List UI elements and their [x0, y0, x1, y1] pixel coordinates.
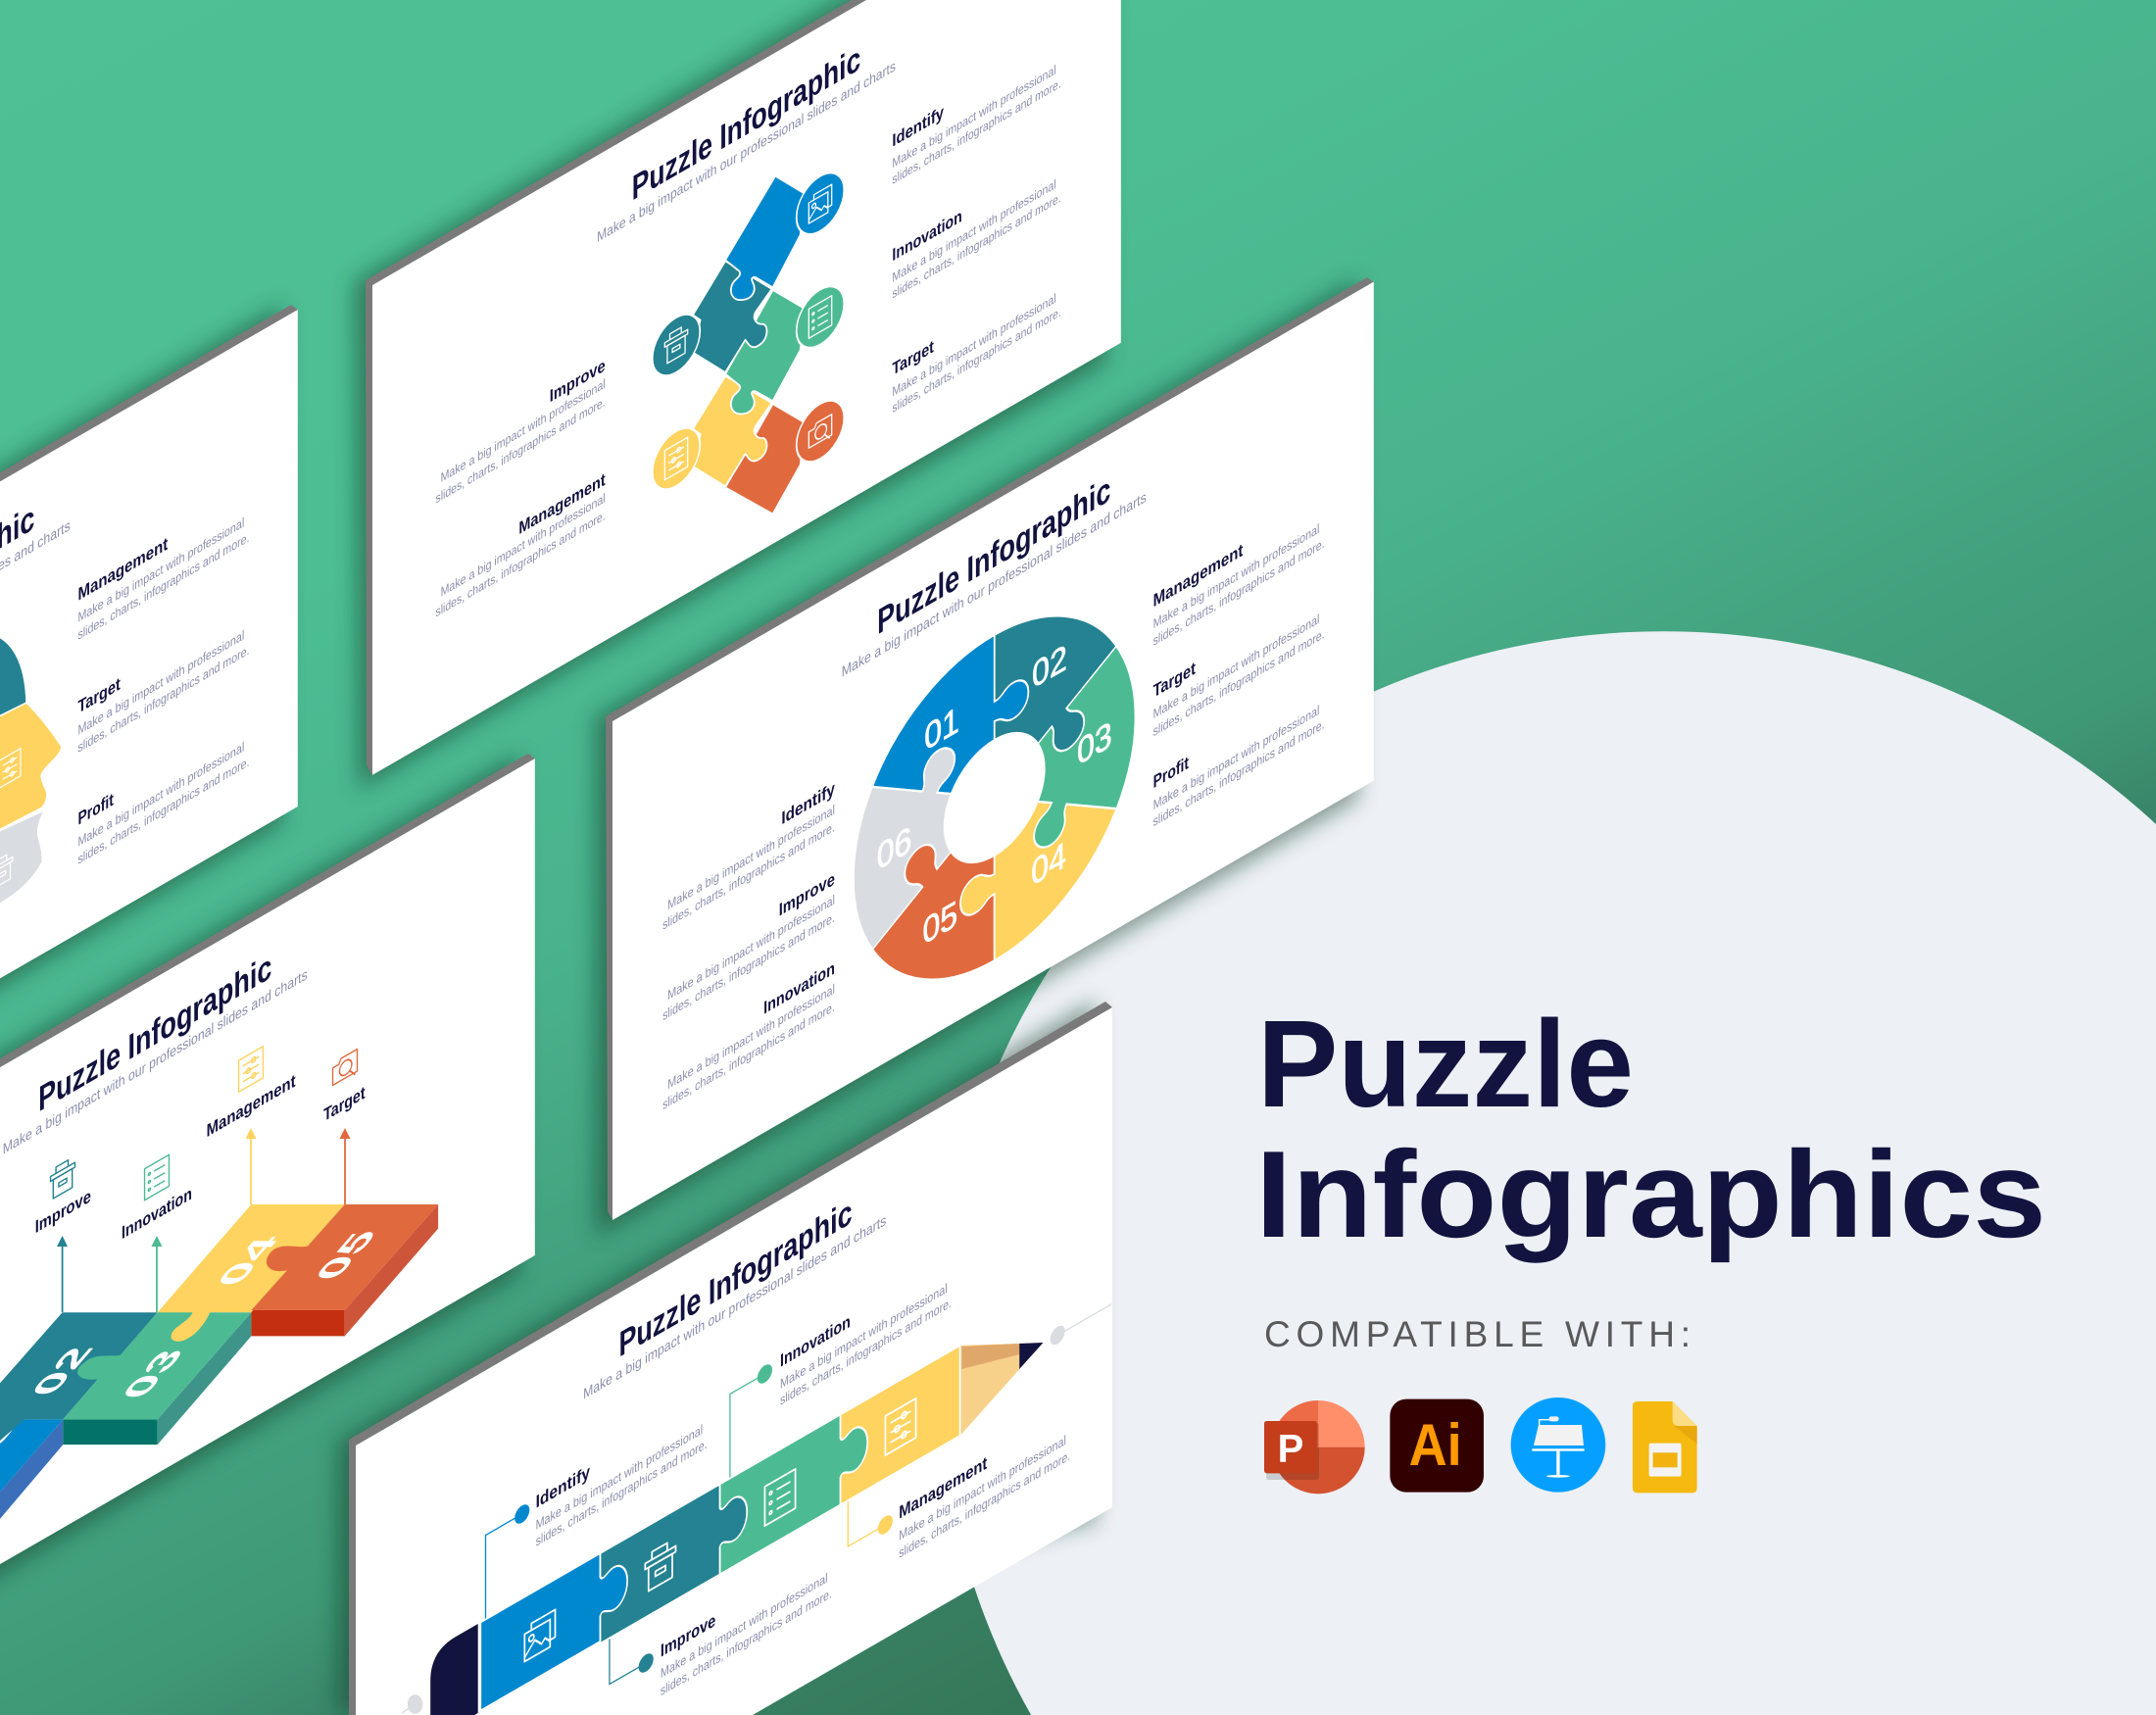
text block: target: slides, charts, infographics and more.	[1153, 625, 1325, 740]
text block: innovation: Make a big impact with professional	[892, 176, 1056, 285]
piece: green	[725, 290, 806, 414]
heading: Puzzle: Puzzle	[1257, 995, 1634, 1133]
pencil	[430, 1298, 1043, 1715]
slide title: Puzzle Infographic	[632, 38, 860, 209]
label: management: Management	[207, 1070, 296, 1142]
text block: management: slides, charts, infographics and more.	[436, 508, 606, 620]
pencil end	[430, 1624, 478, 1715]
icon: sliders	[885, 1398, 916, 1455]
guide line left	[402, 1695, 422, 1713]
green top	[63, 1312, 251, 1419]
icon: Illustrator: Ai	[1409, 1412, 1462, 1478]
segment teal	[600, 1468, 747, 1643]
number 05: 05	[306, 1231, 386, 1280]
text block: target: Target	[892, 336, 934, 379]
orange top	[251, 1204, 438, 1310]
slide subtitle: Make a big impact with our professional slides and charts	[842, 488, 1147, 681]
pencil wood	[960, 1298, 1043, 1436]
badge: green list	[797, 276, 844, 359]
icon: Keynote	[1511, 1397, 1605, 1493]
number 05: 05	[922, 893, 957, 953]
number 03: 03	[1077, 713, 1112, 773]
segment 06	[811, 717, 990, 950]
blue side	[0, 1419, 63, 1519]
3D puzzle	[0, 1204, 438, 1519]
text block: innovation: Make a big impact with professional	[667, 981, 835, 1093]
heading: Infographics: Infographics	[1255, 1125, 2046, 1263]
icon: box	[0, 852, 13, 890]
text block: profit: Make a big impact with professional	[1153, 702, 1319, 813]
text block: identify: Identify	[781, 778, 835, 829]
panel: slide pencil	[338, 1001, 1112, 1715]
arrow: innovation	[151, 1236, 163, 1312]
text block: improve: Improve	[550, 355, 606, 407]
icon: camera	[333, 1050, 357, 1088]
icon: box	[51, 1156, 74, 1200]
text block: improve: slides, charts, infographics and more.	[436, 394, 606, 507]
icon: Google Slides	[1633, 1401, 1697, 1493]
number 02: 02	[1032, 636, 1067, 697]
panel: slide left top	[0, 305, 298, 1264]
icon: sliders	[0, 749, 21, 788]
slide subtitle: Make a big impact with our professional slides and charts	[3, 965, 308, 1158]
pencil wood band	[961, 1313, 1019, 1388]
label: compatible with: COMPATIBLE WITH:	[1264, 1314, 1690, 1354]
segment 01	[872, 629, 1051, 798]
text block: management: slides, charts, infographics and more.	[1153, 535, 1325, 649]
text block: management: Management	[1153, 539, 1243, 612]
compatible app icons	[1264, 1397, 1697, 1494]
text block: management: Management	[78, 533, 168, 605]
piece: blue	[725, 176, 806, 300]
text block: target: Make a big impact with professional	[892, 290, 1056, 400]
text block: target: slides, charts, infographics and more.	[892, 304, 1061, 416]
icon: list	[764, 1469, 796, 1526]
text block: management: slides, charts, infographics and more.	[78, 529, 249, 643]
background circle	[937, 631, 2156, 1715]
segment 03	[1000, 646, 1177, 878]
callout: management connector	[848, 1475, 892, 1554]
arrow: improve	[57, 1236, 68, 1312]
text block: improve: Improve	[779, 868, 835, 920]
number 04: 04	[1031, 834, 1066, 894]
text block: identify: Make a big impact with professional	[892, 62, 1056, 171]
segment blue	[480, 1538, 627, 1711]
text block: identify: slides, charts, infographics and more.	[892, 75, 1061, 187]
panel: slide top	[355, 0, 1121, 789]
slide title: Puzzle Infographic	[38, 945, 271, 1120]
green sides	[63, 1312, 251, 1445]
text block: improve: slides, charts, infographics and more.	[661, 1585, 832, 1699]
text block: innovation: Innovation	[892, 205, 962, 266]
text block: identify: Make a big impact with professional	[667, 802, 835, 913]
blue top	[0, 1419, 63, 1492]
text block: management: Make a big impact with professional	[441, 490, 606, 600]
puzzle fragment	[0, 635, 62, 906]
text block: target: Make a big impact with professional	[1153, 611, 1319, 722]
segment green	[720, 1399, 867, 1574]
callout: improve connector	[610, 1613, 653, 1691]
text block: identify: Identify	[536, 1461, 590, 1512]
callout: identify connector	[485, 1502, 529, 1619]
text block: target: Target	[1153, 658, 1196, 702]
icon: image	[524, 1609, 556, 1662]
text block: identify: slides, charts, infographics and more.	[536, 1436, 708, 1549]
text block: improve: Make a big impact with professional	[667, 892, 835, 1004]
piece: yellow	[693, 376, 772, 486]
text block: target: Target	[78, 673, 121, 717]
piece: teal	[693, 261, 772, 372]
text block: profit: slides, charts, infographics and more.	[1153, 715, 1325, 830]
panel: slide donut	[595, 277, 1374, 1237]
text block: innovation: Innovation	[780, 1310, 851, 1371]
number 02: 02	[23, 1347, 102, 1396]
label: innovation: Innovation	[122, 1183, 192, 1244]
text block: innovation: slides, charts, infographics and more.	[780, 1295, 952, 1408]
text block: innovation: slides, charts, infographics and more.	[892, 189, 1061, 302]
piece: orange	[725, 404, 806, 514]
text block: management: Management	[518, 468, 606, 538]
teal top	[0, 1312, 158, 1444]
donut puzzle	[811, 489, 1177, 1106]
text block: identify: Make a big impact with professional	[536, 1421, 703, 1533]
text block: profit: slides, charts, infographics and more.	[78, 754, 249, 867]
slide title: Puzzle Infographic	[618, 1190, 853, 1365]
label: target: Target	[323, 1082, 366, 1126]
panel: slide left 3D puzzle	[0, 754, 535, 1715]
text block: management: Make a big impact with professional	[899, 1432, 1066, 1544]
icon: box	[645, 1539, 675, 1593]
callout: innovation connector	[730, 1362, 771, 1478]
icon: PowerPoint: P	[1278, 1428, 1303, 1471]
icon: list	[145, 1154, 169, 1200]
yellow top	[158, 1204, 345, 1345]
text block: management: Make a big impact with professional	[78, 514, 244, 625]
puzzle stack	[693, 176, 806, 514]
segment yellow	[840, 1346, 960, 1505]
text block: management: Make a big impact with professional	[1153, 520, 1319, 632]
number 06: 06	[877, 818, 911, 878]
segment 04	[938, 798, 1116, 966]
text block: improve: Make a big impact with professional	[441, 375, 606, 485]
text block: innovation: Innovation	[763, 957, 835, 1018]
text block: innovation: Make a big impact with professional	[780, 1280, 948, 1392]
arrow: target	[339, 1128, 351, 1204]
text block: target: Make a big impact with professional	[78, 627, 244, 738]
badge: teal box	[653, 304, 700, 386]
number 04: 04	[208, 1237, 288, 1286]
pencil tip	[1019, 1330, 1043, 1369]
text block: management: slides, charts, infographics and more.	[899, 1447, 1070, 1561]
text block: target: slides, charts, infographics and more.	[78, 642, 249, 756]
text block: profit: Profit	[78, 789, 114, 829]
number 01: 01	[924, 699, 959, 759]
text block: profit: Profit	[1153, 752, 1189, 793]
icon: sliders	[239, 1047, 263, 1092]
segment 02	[995, 564, 1116, 791]
text block: identify: slides, charts, infographics and more.	[662, 818, 835, 933]
badge: orange camera	[797, 390, 844, 472]
text block: improve: Make a big impact with professional	[661, 1570, 827, 1682]
text block: management: Management	[899, 1452, 987, 1523]
text block: identify: Identify	[892, 101, 944, 151]
orange sides	[251, 1204, 438, 1336]
guide line right	[1051, 1296, 1112, 1347]
slide subtitle: Make a big impact with our professional slides and charts	[583, 1211, 886, 1403]
slide surface	[356, 1007, 1112, 1715]
number 03: 03	[113, 1349, 193, 1398]
text block: improve: Improve	[661, 1609, 715, 1661]
badge: blue image	[797, 163, 844, 245]
text block: improve: slides, charts, infographics and more.	[662, 909, 835, 1024]
arrow: management	[245, 1128, 257, 1204]
text block: innovation: slides, charts, infographics and more.	[662, 999, 835, 1113]
badge: yellow sliders	[653, 417, 700, 500]
icon: PowerPoint	[1264, 1400, 1365, 1494]
segment 05	[872, 805, 995, 1031]
icon: Illustrator	[1390, 1399, 1484, 1493]
label: improve: Improve	[35, 1185, 91, 1238]
text block: profit: Make a big impact with professional	[78, 739, 244, 850]
slide subtitle: Make a big impact with our professional slides and charts	[597, 59, 896, 246]
slide title: Puzzle Infographic	[877, 467, 1110, 643]
